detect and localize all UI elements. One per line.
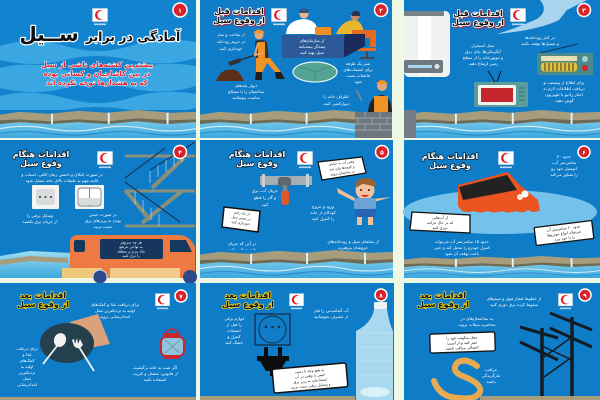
- text: cut off water: و گاز را قطع: [254, 195, 276, 200]
- text: 15 cm: [434, 239, 490, 256]
- shore: [404, 256, 600, 278]
- text: cut off water: جریان آب، برق: [252, 188, 279, 193]
- heading: اقدامات بعد: [420, 291, 466, 300]
- panel: 6 during the flood, car: [403, 140, 600, 278]
- illustration: snake: [434, 361, 480, 398]
- text on van: پناه ببرید و منطقه: [117, 250, 145, 254]
- text: at night: از فانوس، مشعل و کبریت: [132, 371, 178, 376]
- icon: red crescent logo: [510, 8, 526, 25]
- icon: red crescent logo: [272, 8, 286, 25]
- number badge 9: [579, 289, 591, 301]
- callout: be careful: از راه رفتن: [234, 210, 250, 216]
- text: 30 cm: را شناور می‌کند: [550, 172, 578, 177]
- text: food aid: [91, 302, 139, 319]
- title: [19, 22, 181, 46]
- text: food aid: اولیه به نزدیکترین محل: [95, 308, 135, 313]
- text: electrical devices: وسایل برقی را: [27, 213, 53, 218]
- shore: [200, 110, 392, 138]
- icon: plug: [257, 347, 289, 376]
- text: aid centres: امدادرسانی: [17, 382, 37, 387]
- heading: وقوع سیل: [236, 159, 278, 168]
- panel: 7 after the flood, food: [0, 283, 196, 400]
- callout: safety: ایستاده‌اید به پریز برق: [293, 378, 327, 384]
- text: aid centres: نزدیکترین: [19, 370, 35, 375]
- text: 15 cm: کنترل خودرو را مختل کند و حتی: [434, 245, 490, 250]
- text: do not move: در آبی که جریان: [228, 241, 256, 246]
- icon: red crescent logo: [298, 152, 312, 168]
- text: at night: [132, 365, 178, 382]
- text: boil water: آب آشامیدنی را قبل: [313, 308, 349, 313]
- callout: be careful: خودداری کنید: [231, 220, 250, 226]
- text: power lines: از خطوط فشار قوی و سیم‌های: [487, 296, 541, 301]
- illustration: television: [474, 71, 528, 107]
- callout: leave the car: که در حال حرکت: [427, 221, 453, 225]
- callout: safety: [272, 363, 348, 393]
- text: around the house: اطراف خانه را: [323, 94, 349, 99]
- heading: اقدامات هنگام: [229, 149, 285, 159]
- number badge 8: [375, 289, 387, 301]
- text: buildings: محاصره سیلاب نروید: [458, 322, 496, 327]
- text: insurance: بیمه‌گر بیمه‌نامه: [299, 44, 325, 49]
- callout: stay calm: [318, 157, 366, 180]
- illustration: plate and cutlery: [40, 314, 110, 371]
- heading: [452, 9, 504, 27]
- illustration: van: [62, 235, 197, 284]
- number badge 8: ۸: [379, 292, 383, 300]
- illustration: digging worker: [216, 30, 285, 81]
- text on van: [117, 240, 145, 258]
- text: snake bites: [482, 367, 500, 384]
- text: water path: خودداری کنید: [220, 46, 243, 51]
- panel: 2 before the flood: [200, 0, 392, 138]
- text: wall: دیوار پایه‌های: [235, 83, 257, 88]
- text: 30 cm: اتومبیل خود رو: [550, 166, 577, 171]
- illustration: manhole: [293, 62, 337, 82]
- illustration: sinking car: [458, 172, 540, 212]
- text: 30 cm: [550, 154, 578, 177]
- text: move valuables: اثاثیه مهم به طبقات بالای خانه منتقل شود: [26, 178, 98, 183]
- text: electrical appliances: و موتورخانه را از سطح: [463, 55, 503, 60]
- callout: 60 cm: حدود ۶۰ سانتی‌متر آب: [546, 223, 581, 233]
- text on van: به نواحی مرتفع: [119, 245, 143, 249]
- text: water path: در حریم رودخانه: [217, 39, 245, 44]
- number badge 6: [578, 146, 590, 158]
- text: listen to radio: برای اطلاع از وضعیت و: [543, 80, 584, 85]
- callout: injured: [430, 332, 495, 353]
- shore: [0, 110, 196, 138]
- icon: wall socket: [255, 314, 290, 345]
- panel: 3 before the flood, appliances: [404, 0, 600, 138]
- panel: 4 during the flood, shutting off: [0, 140, 197, 284]
- red intro text: در بین کاشاچیان و کسانی بوده: [44, 70, 151, 78]
- heading: [222, 291, 274, 309]
- callout: injured: تمیز کنید و از آسیب: [447, 339, 477, 346]
- shore: [480, 396, 600, 400]
- icon: lantern: [161, 329, 184, 359]
- text: children: را کنترل کنید: [312, 216, 334, 221]
- number badge 7: ۷: [179, 294, 183, 300]
- text: buildings: به ساختمان‌های در: [460, 316, 493, 321]
- text: rivers: [521, 35, 559, 46]
- text: one-way valve: شیر یک طرفه: [346, 61, 371, 66]
- heading: اقدامات هنگام: [13, 149, 69, 159]
- illustration: electricity pylons: [520, 313, 592, 398]
- panel: 9 after the flood, hazards: [404, 283, 600, 400]
- shore: [404, 110, 600, 138]
- callout: injured: محل سکونت خود را: [446, 335, 477, 341]
- text: rivers: در کنار رودخانه‌ها: [525, 35, 555, 40]
- callout: stay calm: وقتی آب به خیابان: [328, 159, 355, 167]
- text: electrical appliances: آبگرمکن‌ها، پانل برق: [465, 49, 502, 54]
- text: aid centres: اولیه به: [21, 364, 33, 369]
- callout: safety: به هیچ وجه با دست: [294, 368, 324, 374]
- heading: اقدامات هنگام: [422, 151, 478, 161]
- number badge 7: [175, 290, 187, 302]
- text: water path: از ساخت و ساز: [216, 32, 245, 37]
- heading: اقدامات بعد: [225, 291, 271, 300]
- shore: [0, 397, 196, 400]
- number badge 3: [578, 4, 590, 16]
- text: aid centres: کمک‌های: [20, 358, 34, 363]
- wave bands: [0, 40, 196, 113]
- text: flood watching: خروشان بپرهیزید: [338, 245, 368, 250]
- panel: 1 cover: [0, 0, 196, 138]
- heading: از وقوع سیل: [17, 300, 69, 309]
- text on van: را ترک کنید: [122, 253, 140, 258]
- number badge 5: ۵: [380, 150, 384, 156]
- shore: [200, 396, 355, 400]
- text: move valuables: [20, 172, 103, 183]
- text: insurance: از سازمان‌های: [300, 38, 324, 43]
- heading: از وقوع سیل: [452, 18, 504, 27]
- text: 15 cm: حدود ۱۵ سانتی‌متر آب می‌تواند: [435, 239, 489, 244]
- callout: stay calm: به ساختمان بروید: [330, 169, 355, 176]
- panel: 8 after the flood, water and electricity: [200, 283, 394, 400]
- text: danger of switches: بودن به پریزهای برق: [85, 218, 121, 223]
- text: one-way valve: [343, 61, 373, 84]
- heading: اقدامات قبل: [214, 7, 264, 16]
- illustration: river: [497, 0, 587, 34]
- shore: [200, 250, 393, 278]
- callout: 60 cm: می‌تواند انواع خودروها: [547, 229, 581, 238]
- text: electrical appliances: [463, 43, 503, 66]
- text: listen to radio: گوش دهید.: [554, 98, 574, 103]
- text: boil water: از مصرف بجوشانید: [314, 314, 348, 319]
- text: electrical: کنترل و: [226, 334, 241, 339]
- illustration: water heater: [404, 11, 450, 77]
- illustration: water bottle: [356, 302, 393, 400]
- heading: [422, 151, 478, 170]
- text: aid centres: محل: [23, 376, 31, 381]
- text: at night: اگر شب به خانه برگشتید،: [133, 365, 177, 370]
- heading: اقدامات قبل: [453, 9, 503, 18]
- callout: 60 cm: را با خود ببرد: [554, 235, 575, 242]
- text: rivers: و مسیل‌ها توقف نکنید: [521, 41, 559, 46]
- text: aid centres: برای دریافت: [16, 346, 38, 351]
- text: food aid: برای دریافت غذا و کمک‌های: [91, 302, 139, 307]
- water: [0, 251, 72, 278]
- text: insurance: سیل تهیه کنید: [300, 50, 324, 55]
- text: boil water: [313, 308, 349, 319]
- number badge 9: ۹: [583, 292, 587, 300]
- text: flood watching: [327, 239, 379, 250]
- text: power lines: [487, 296, 541, 307]
- number badge 2: [374, 4, 388, 16]
- text: electrical appliances: محل استقرار: [470, 43, 494, 48]
- red intro text: [41, 61, 154, 87]
- heading: وقوع سیل: [429, 161, 471, 170]
- text: around the house: [323, 94, 350, 106]
- text: danger of switches: [85, 212, 121, 229]
- text: around the house: دیوارکشی کنید.: [323, 101, 350, 106]
- text: listen to radio: [543, 80, 585, 103]
- text: listen to radio: اخبار رادیو یا تلویزیون: [545, 92, 583, 97]
- text: snake bites: مراقب: [485, 367, 497, 372]
- text: one-way valve: برای انشعاب‌های: [343, 67, 373, 72]
- text: one-way valve: فاضلاب نصب: [346, 73, 370, 78]
- callout: leave the car: [410, 212, 470, 233]
- number badge 1: ۱: [178, 8, 182, 14]
- icon: red crescent logo: [155, 294, 170, 309]
- number badge 5: [376, 146, 388, 158]
- text: electrical: [224, 316, 244, 345]
- callout: safety: خیس یا وقتی در آب: [294, 372, 326, 379]
- number badge 2: ۲: [379, 8, 383, 14]
- text: power lines: سقوط کرده برق دوری کنید: [490, 302, 538, 307]
- number badge 4: [174, 146, 186, 158]
- illustration: boy: [337, 178, 392, 225]
- icon: red crescent logo: [498, 152, 514, 168]
- icon: red crescent logo: [289, 294, 304, 309]
- text: aid centres: غذا و: [22, 352, 32, 357]
- text: cut off water: [252, 188, 279, 207]
- heading: [229, 149, 285, 168]
- red intro text: بیشترین کشته‌های ناشی از سیل: [41, 61, 154, 69]
- text: wall: ساختمان را با مصالح: [228, 89, 265, 94]
- icon: red crescent logo: [92, 8, 108, 25]
- text: electrical: خشک کنید: [225, 340, 243, 345]
- text: electrical: را قبل از: [225, 322, 242, 327]
- icon: red crescent logo: [98, 152, 112, 168]
- text: electrical: استفاده: [227, 328, 241, 333]
- heading: از وقوع سیل: [417, 300, 469, 309]
- number badge 1: [173, 3, 187, 17]
- callout: 60 cm: [534, 221, 594, 245]
- text: snake bites: مارگزیدگی: [482, 373, 500, 378]
- text: children: کودکان از خانه: [310, 210, 336, 215]
- text: danger of switches: دست نزنید: [94, 224, 113, 229]
- text: aid centres: [16, 346, 38, 387]
- text: food aid: امدادرسانی بروید: [100, 314, 130, 319]
- text: at night: استفاده نکنید: [144, 377, 166, 382]
- text: flood watching: از تماشای سیل و رودخانه‌های: [327, 239, 379, 244]
- text: children: [310, 204, 336, 221]
- title: ســیل: [19, 22, 79, 46]
- text: buildings: [458, 316, 496, 327]
- heading: از وقوع سیل: [213, 16, 265, 25]
- heading: وقوع سیل: [20, 159, 62, 168]
- callout: safety: و وسایل برقی دست نزنید: [291, 382, 331, 390]
- text: insurance: [299, 38, 325, 55]
- title: آمادگی در برابر: [85, 29, 181, 44]
- heading: [17, 291, 69, 309]
- icon: power socket: [32, 185, 59, 209]
- text: cut off water: کنید: [262, 202, 268, 207]
- heading: [13, 149, 69, 168]
- icon: light switch: [75, 185, 104, 209]
- callout: injured: احتمالی مراقب باشید: [446, 345, 479, 351]
- illustration: insurance office: [282, 8, 376, 58]
- text: do not move: [228, 241, 257, 252]
- text: wall: [228, 83, 265, 100]
- text: electrical: لوازم برقی: [224, 316, 244, 321]
- heading: از وقوع سیل: [222, 300, 274, 309]
- number badge 6: ۶: [582, 150, 586, 156]
- text: wall: مناسب بپوشانید: [232, 95, 260, 100]
- callout: leave the car: از آب‌هایی: [432, 215, 448, 220]
- text: children: ورود و خروج: [312, 204, 334, 209]
- callout: be careful: [222, 207, 260, 232]
- illustration: staircase: [125, 142, 195, 226]
- icon: red crescent logo: [558, 294, 573, 309]
- icon: radio: [537, 44, 593, 75]
- heading: [417, 291, 469, 309]
- callout: leave the car: دوری کنید: [432, 226, 448, 230]
- number badge 3: ۳: [582, 8, 586, 14]
- illustration: bricklayer: [355, 80, 392, 138]
- text: one-way valve: شود: [354, 79, 362, 84]
- text: electrical appliances: زمین ارتفاع دهید.: [468, 61, 498, 66]
- red intro text: که به هشدارها توجه نکرده اند: [46, 79, 149, 87]
- text: 15 cm: باعث توقف آن شود: [445, 251, 479, 256]
- text: snake bites: باشید: [486, 379, 496, 384]
- text: danger of switches: در صورت خیس: [89, 212, 117, 217]
- text: electrical devices: از جریان برق بکشید: [22, 219, 58, 224]
- callout: stay calm: و کوچه‌ها وارد شد: [329, 164, 355, 172]
- text: listen to radio: دریافت اطلاعات لازم به: [543, 86, 585, 91]
- heading: [213, 7, 265, 25]
- illustration: flood pool: [403, 190, 597, 234]
- text: water path: [216, 32, 245, 51]
- text: do not move: دارد حرکت نکنید: [228, 247, 257, 252]
- callout: be careful: در مسیر سیل: [231, 215, 252, 221]
- text: 30 cm: سانتی‌متر آب،: [552, 160, 577, 165]
- text: move valuables: در صورت امکان و داشتن زمان کافی، اسباب و: [20, 172, 103, 177]
- number badge 4: ۴: [178, 150, 182, 156]
- heading: اقدامات بعد: [20, 291, 66, 300]
- text on van: هر چه سریع‌تر: [119, 240, 142, 244]
- icon: water pipe: [260, 174, 312, 205]
- text: 30 cm: حدود ۳۰: [557, 154, 572, 159]
- text: electrical devices: [22, 213, 58, 224]
- panel: 5 during the flood, safety: [200, 140, 393, 278]
